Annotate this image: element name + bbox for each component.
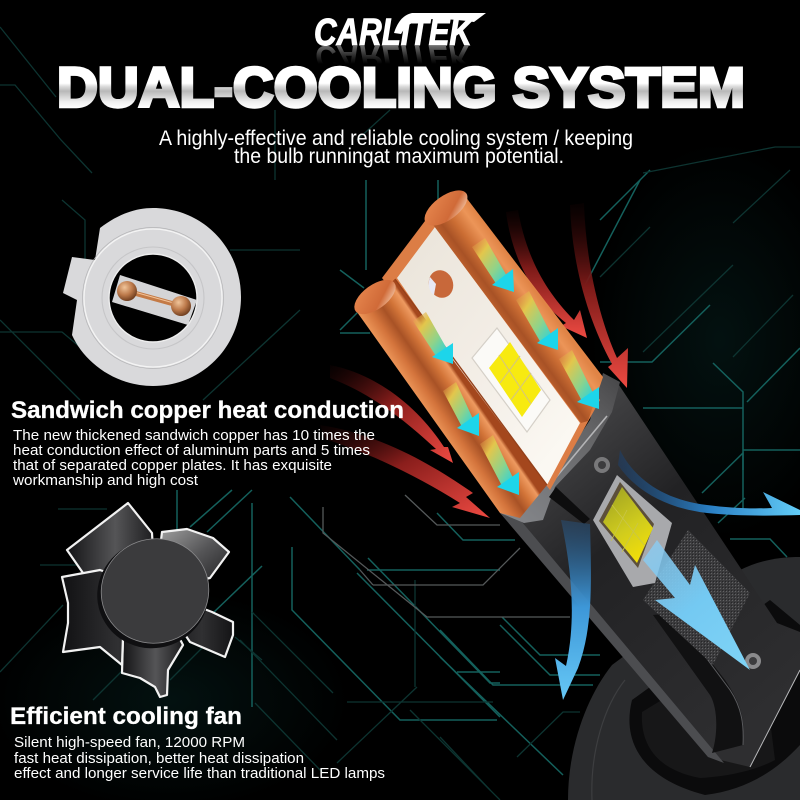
screw (745, 653, 761, 669)
heat arrow stem (480, 435, 513, 486)
text: sandwich copper description: The new thickened sandwich copper has 10 times the (13, 428, 375, 444)
fan blade (155, 529, 229, 590)
socket plate (63, 208, 241, 386)
heat arrow stem (472, 238, 508, 285)
lower chip recess (599, 482, 654, 568)
logo wordmark: CARLITEK (314, 12, 474, 54)
lower LED chip (603, 487, 653, 563)
right tube end cap (419, 184, 473, 232)
title: DUAL-COOLING SYSTEM (57, 56, 745, 118)
socket opening (109, 254, 197, 342)
logo reflection: CARLITEK (315, 38, 473, 76)
fan blade (62, 570, 155, 665)
heat arrow head (492, 269, 514, 292)
holder highlight (548, 416, 607, 487)
heat arrow stem (516, 291, 552, 343)
left copper tube (357, 279, 547, 518)
subtitle (159, 127, 633, 168)
left tube end cap (349, 273, 401, 321)
arrow: red heat inflow left (330, 365, 453, 463)
subtitle: A highly-effective and reliable cooling system / keeping (159, 127, 633, 150)
arrow: red heat inflow upper (506, 210, 587, 338)
heat arrow head (537, 328, 558, 350)
holder edge line (750, 670, 800, 767)
socket ring (629, 600, 800, 795)
icon: H7 socket (63, 208, 241, 386)
copper backing (382, 217, 600, 490)
fan blade (67, 503, 155, 590)
arrow: blue air outflow down (555, 520, 591, 700)
right copper tube (428, 196, 603, 423)
subtitle: the bulb runningat maximum potential. (234, 145, 564, 168)
left tube inner line (395, 279, 547, 485)
arrow: red heat inflow lower (320, 425, 490, 518)
arrow: red heat inflow right (570, 203, 628, 388)
logo swoosh (394, 13, 486, 34)
upper LED chip (489, 342, 541, 417)
arrow: blue air outflow right (618, 450, 800, 516)
upper LED base (472, 328, 550, 432)
lower chip frame (593, 475, 672, 587)
arrows: heat flow along copper (413, 238, 599, 495)
holder U groove (653, 613, 744, 753)
contact bar (112, 275, 197, 325)
socket rings (82, 228, 224, 368)
text: cooling fan description: fast heat dissipation, better heat dissipation (14, 751, 304, 767)
text: sandwich copper description: heat conduction effect of aluminum parts and 5 times (13, 443, 370, 459)
text: sandwich copper description: that of separated copper plates. It has exquisite (13, 458, 332, 474)
heat arrow stem (559, 350, 593, 401)
text: sandwich copper description: workmanship and high cost (12, 473, 198, 489)
fan blade (155, 590, 233, 657)
holder collar (500, 373, 620, 523)
text: cooling fan description: effect and longer service life than traditional LED lamps (14, 766, 385, 782)
text: cooling fan description (14, 735, 385, 782)
heat arrow head (457, 413, 479, 436)
logo: Carlitek (314, 12, 486, 76)
mounting hole (425, 267, 457, 301)
heading: sandwich copper: Sandwich copper heat conduction (11, 397, 404, 424)
holder side face (500, 513, 724, 763)
heading: cooling fan: Efficient cooling fan (10, 703, 242, 730)
copper contacts (117, 281, 191, 316)
LED holder (500, 373, 800, 767)
holder slot (549, 487, 590, 524)
fan hub (82, 524, 224, 664)
icon: cooling fan (62, 503, 233, 697)
heat arrow head (577, 387, 599, 409)
text: cooling fan description: Silent high-speed fan, 12000 RPM (14, 735, 245, 751)
mesh thermal patch (643, 530, 750, 665)
screw (594, 457, 610, 473)
fan blade (122, 590, 183, 697)
holder groove highlight (673, 613, 743, 745)
copper heat sink (349, 184, 603, 518)
heat arrow stem (443, 382, 473, 427)
holder main face (522, 382, 800, 767)
heat arrow stem (413, 312, 447, 356)
heat arrow head (432, 343, 453, 364)
white circuit plate (397, 227, 580, 485)
arrow: blue air outflow centre (643, 540, 750, 670)
lamp base (568, 557, 800, 800)
socket collar (642, 640, 775, 778)
base groove (592, 680, 625, 800)
text: sandwich copper description (12, 428, 375, 489)
heat arrow head (497, 472, 519, 495)
